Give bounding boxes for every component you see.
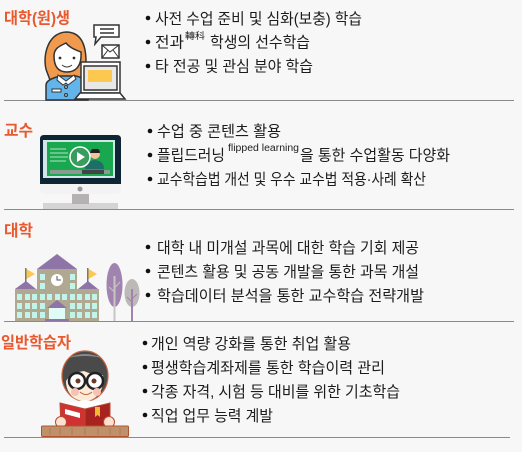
text: professor uses: 을 통한 수업활동 다양화: [300, 146, 450, 164]
text: general learner uses: 개인 역량 강화를 통한 취업 활용: [151, 335, 351, 353]
icon: monitor with video lecture: [40, 135, 121, 209]
text: general learner uses: 각종 자격, 시험 등 대비를 위한 기초학습: [151, 383, 400, 401]
icon: campus building and trees: [15, 254, 140, 321]
heading: students: 대학(원)생: [4, 10, 70, 28]
text: university uses: 학습데이터 분석을 통한 교수학습 전략개발: [157, 287, 424, 305]
panel: professors: [4, 122, 450, 209]
text: professor uses: [148, 122, 450, 188]
icon: student with laptop: [45, 25, 125, 100]
text: student uses: 타 전공 및 관심 분야 학습: [155, 58, 313, 76]
text: professor uses: 교수학습법 개선 및 우수 교수법 적용·사례 확산: [157, 170, 426, 188]
text: general learner uses: 직업 업무 능력 계발: [151, 407, 273, 425]
icon: boy reading a book: [42, 351, 128, 436]
text: general learner uses: 평생학습계좌제를 통한 학습이력 관리: [151, 359, 385, 377]
text: professor uses: 플립드러닝: [157, 146, 225, 164]
text: university uses: 콘텐츠 활용 및 공동 개발을 통한 과목 개설: [157, 263, 419, 281]
text: student uses: 사전 수업 준비 및 심화(보충) 학습: [155, 10, 362, 28]
heading: university: 대학: [4, 222, 33, 240]
text: student uses: [146, 10, 362, 76]
text: student uses: 轉科: [185, 30, 205, 41]
text: student uses: 전과: [155, 34, 184, 52]
text: professor uses: 수업 중 콘텐츠 활용: [157, 122, 281, 140]
text: professor uses: flipped learning: [228, 143, 299, 154]
heading: general learners: 일반학습자: [1, 334, 71, 352]
text: student uses: 학생의 선수학습: [210, 34, 310, 52]
panel: university students: [4, 10, 362, 100]
panel: university: [4, 222, 424, 321]
text: general learner uses: [143, 335, 400, 425]
heading: professors: 교수: [4, 122, 33, 140]
text: university uses: [146, 239, 424, 305]
text: university uses: 대학 내 미개설 과목에 대한 학습 기회 제공: [157, 239, 419, 257]
panel: general learners: [1, 334, 400, 436]
